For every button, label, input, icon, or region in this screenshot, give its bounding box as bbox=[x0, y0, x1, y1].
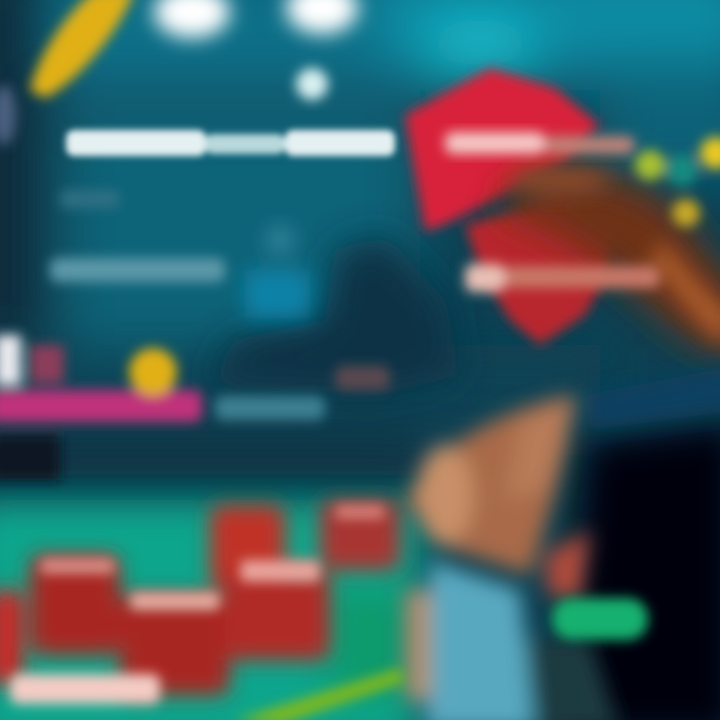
white bokeh lights bbox=[154, 0, 358, 38]
green poker table bbox=[0, 500, 420, 720]
blurred white title text, left bbox=[66, 130, 395, 156]
pink bar and yellow chip, left bbox=[0, 85, 202, 480]
white bokeh dot bbox=[296, 68, 328, 100]
dark silhouette in the middle bbox=[205, 235, 460, 395]
red hexagon badge bbox=[405, 68, 610, 345]
blue glow block bbox=[245, 225, 310, 318]
blurred subtitle text bbox=[50, 190, 660, 420]
yellow top-left shape bbox=[30, 0, 135, 98]
finger highlights on hand bbox=[510, 166, 720, 345]
stacks of red poker chips bbox=[0, 500, 400, 704]
blue jacket edge bbox=[585, 365, 720, 430]
light blue sleeve bbox=[405, 560, 620, 720]
black right region bbox=[560, 420, 720, 720]
blurred white title text, on badge bbox=[445, 132, 635, 154]
hand holding the badge bbox=[500, 172, 720, 360]
background gradient regions bbox=[0, 0, 720, 475]
green chip lower right bbox=[552, 598, 648, 640]
coloured chips upper right bbox=[635, 137, 720, 227]
lower hand bbox=[405, 395, 590, 600]
yellow-green table line bbox=[235, 668, 405, 720]
chip highlights bbox=[10, 505, 385, 704]
